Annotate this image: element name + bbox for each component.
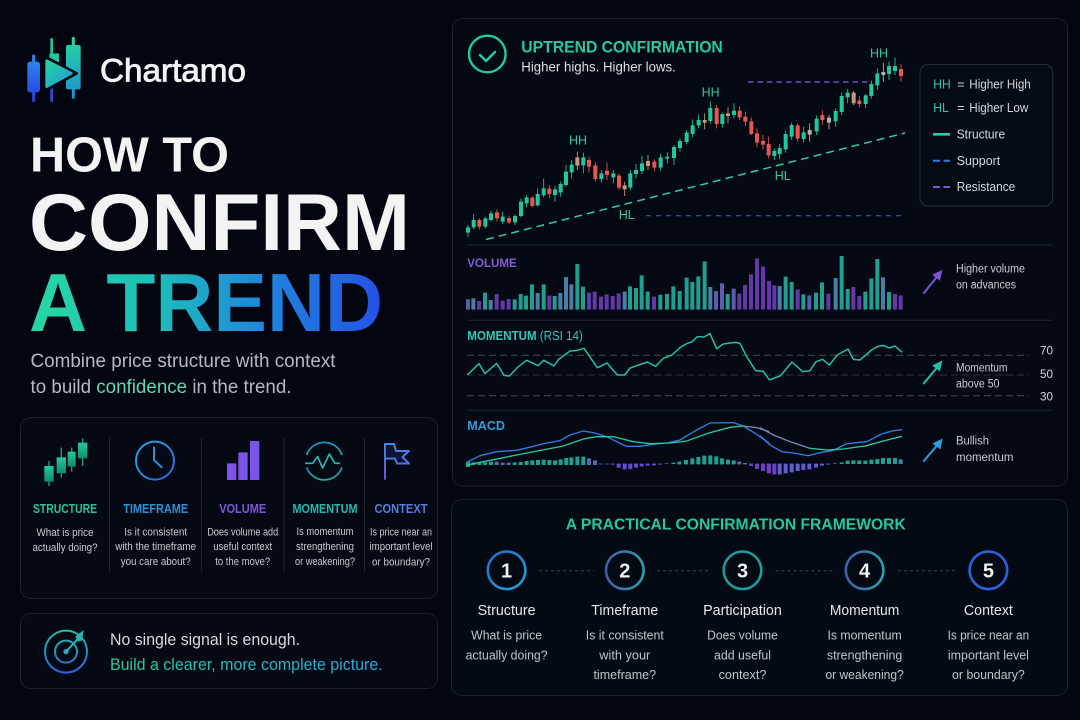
icon: check circle (469, 36, 506, 72)
step 3: context? (719, 667, 766, 682)
icon: bars (227, 441, 259, 480)
MACD pane (467, 418, 1014, 474)
framework heading: A PRACTICAL CONFIRMATION FRAMEWORK (566, 516, 906, 534)
step 5: or boundary? (952, 667, 1025, 682)
column: momentum: strengthening (296, 541, 354, 553)
column: momentum (292, 442, 358, 568)
icon: candles (44, 438, 87, 486)
step 1 (466, 552, 548, 662)
step 3: Participation (703, 602, 782, 619)
RSI scale: 30 (1040, 390, 1053, 404)
column: context: important level (370, 541, 432, 553)
step 1: Structure (478, 602, 536, 619)
column: timeframe (114, 442, 196, 568)
step 2: with your (598, 647, 651, 662)
panel: key takeaway: Build a clearer, more complete picture. (110, 655, 383, 674)
title: HOW TO (30, 128, 229, 182)
title: CONFIRM (29, 178, 410, 268)
panel: key takeaway: No single signal is enough. (110, 630, 300, 649)
column: volume: useful context (213, 541, 273, 553)
column: structure: What is price (36, 527, 94, 539)
column: structure: actually doing? (32, 542, 98, 554)
column: structure: STRUCTURE (33, 502, 97, 516)
volume note (956, 264, 1025, 292)
momentum note: Momentum (956, 363, 1008, 375)
step 3 (703, 552, 782, 682)
legend: Higher High (969, 78, 1031, 92)
arrow: volume (923, 272, 941, 294)
swing labels: HH (569, 134, 587, 148)
column: volume: to the move? (215, 556, 270, 568)
column: structure (32, 438, 98, 554)
MACD lines (467, 423, 902, 465)
column: context: Is price near an (370, 526, 432, 538)
panel: five signals (20, 418, 438, 598)
RSI scale: 50 (1040, 367, 1053, 381)
RSI line (467, 334, 902, 380)
step 2: Is it consistent (586, 628, 664, 643)
column: context (370, 444, 432, 568)
MACD note: Bullish (956, 436, 989, 448)
column: context: CONTEXT (374, 502, 428, 516)
icon: flag (385, 444, 409, 479)
legend: Higher Low (969, 101, 1029, 115)
step 1: 1 (501, 560, 512, 582)
panel: key takeaway (20, 614, 438, 688)
subtitle (30, 350, 336, 398)
candlestick chart (468, 46, 905, 240)
step 4: Momentum (830, 602, 899, 619)
volume note: on advances (956, 280, 1016, 292)
column: volume: Does volume add (207, 526, 278, 538)
volume note: Higher volume (956, 264, 1025, 276)
momentum pane (467, 329, 1053, 404)
icon: pulse gauge (305, 442, 342, 480)
arrow: MACD (923, 440, 941, 462)
step 5: important level (948, 647, 1029, 662)
RSI scale (1040, 344, 1053, 404)
step 4 (825, 552, 904, 682)
step 1: actually doing? (466, 647, 548, 662)
MACD note (956, 436, 1014, 464)
legend (920, 64, 1053, 206)
step 5 (948, 552, 1029, 682)
column: volume (207, 441, 278, 568)
step 4: or weakening? (825, 667, 904, 682)
step 5: Context (964, 602, 1014, 619)
step 5: 5 (983, 560, 994, 582)
legend: Resistance (957, 180, 1015, 194)
swing labels: HL (619, 208, 635, 222)
step 2 (586, 552, 664, 682)
step 2: 2 (619, 560, 630, 582)
icon: candlestick play mark (27, 38, 81, 101)
column: context: or boundary? (372, 556, 430, 568)
swing labels: HL (775, 169, 791, 183)
column: momentum: or weakening? (295, 556, 355, 568)
volume bars (468, 256, 901, 310)
column: timeframe: with the timeframe (114, 541, 196, 553)
chart heading: UPTREND CONFIRMATION (521, 39, 723, 57)
step 3: 3 (737, 560, 748, 582)
title (29, 128, 410, 349)
legend: HL (933, 101, 949, 115)
step 5: Is price near an (948, 628, 1029, 643)
subtitle: Combine price structure with context (30, 350, 336, 372)
step 3: add useful (714, 647, 771, 662)
momentum label: MOMENTUM (RSI 14) (467, 329, 583, 343)
step 4: 4 (859, 560, 871, 582)
step 4: Is momentum (827, 628, 902, 643)
column: timeframe: Is it consistent (124, 526, 188, 538)
legend: Support (957, 154, 1001, 168)
legend: = (957, 78, 965, 92)
swing labels: HH (702, 86, 720, 100)
column: volume: VOLUME (219, 502, 266, 516)
logo: Chartamo (27, 38, 246, 101)
column: momentum: MOMENTUM (292, 502, 358, 516)
momentum note: above 50 (956, 379, 1000, 391)
swing labels: HH (870, 46, 888, 60)
icon: clock (136, 442, 174, 480)
step 1: What is price (471, 628, 542, 643)
support line (646, 215, 903, 217)
trendline (486, 133, 905, 240)
column: momentum: Is momentum (296, 526, 354, 538)
MACD note: momentum (956, 452, 1014, 464)
brand name: Chartamo (100, 52, 246, 88)
column: timeframe: you care about? (121, 556, 191, 568)
resistance line (748, 81, 872, 83)
MACD histogram (468, 455, 901, 474)
chart subheading: Higher highs. Higher lows. (521, 59, 676, 75)
legend: HH (933, 78, 951, 92)
momentum note (956, 363, 1008, 391)
column: timeframe: TIMEFRAME (123, 502, 188, 516)
icon: target (45, 630, 87, 673)
MACD label: MACD (467, 418, 505, 433)
step 2: timeframe? (593, 667, 656, 682)
step 4: strengthening (827, 647, 902, 662)
arrow: momentum (923, 362, 941, 384)
volume label: VOLUME (467, 256, 517, 270)
swing labels (569, 46, 888, 222)
RSI scale: 70 (1040, 344, 1053, 358)
subtitle: to build confidence in the trend. (30, 376, 292, 398)
legend: Structure (957, 128, 1005, 142)
title: A TREND (29, 256, 383, 349)
legend: = (957, 101, 965, 115)
step 2: Timeframe (591, 602, 658, 619)
step 3: Does volume (707, 628, 778, 643)
volume pane (467, 256, 1025, 310)
panel: uptrend chart (452, 18, 1068, 486)
panel: practical framework (452, 500, 1068, 696)
